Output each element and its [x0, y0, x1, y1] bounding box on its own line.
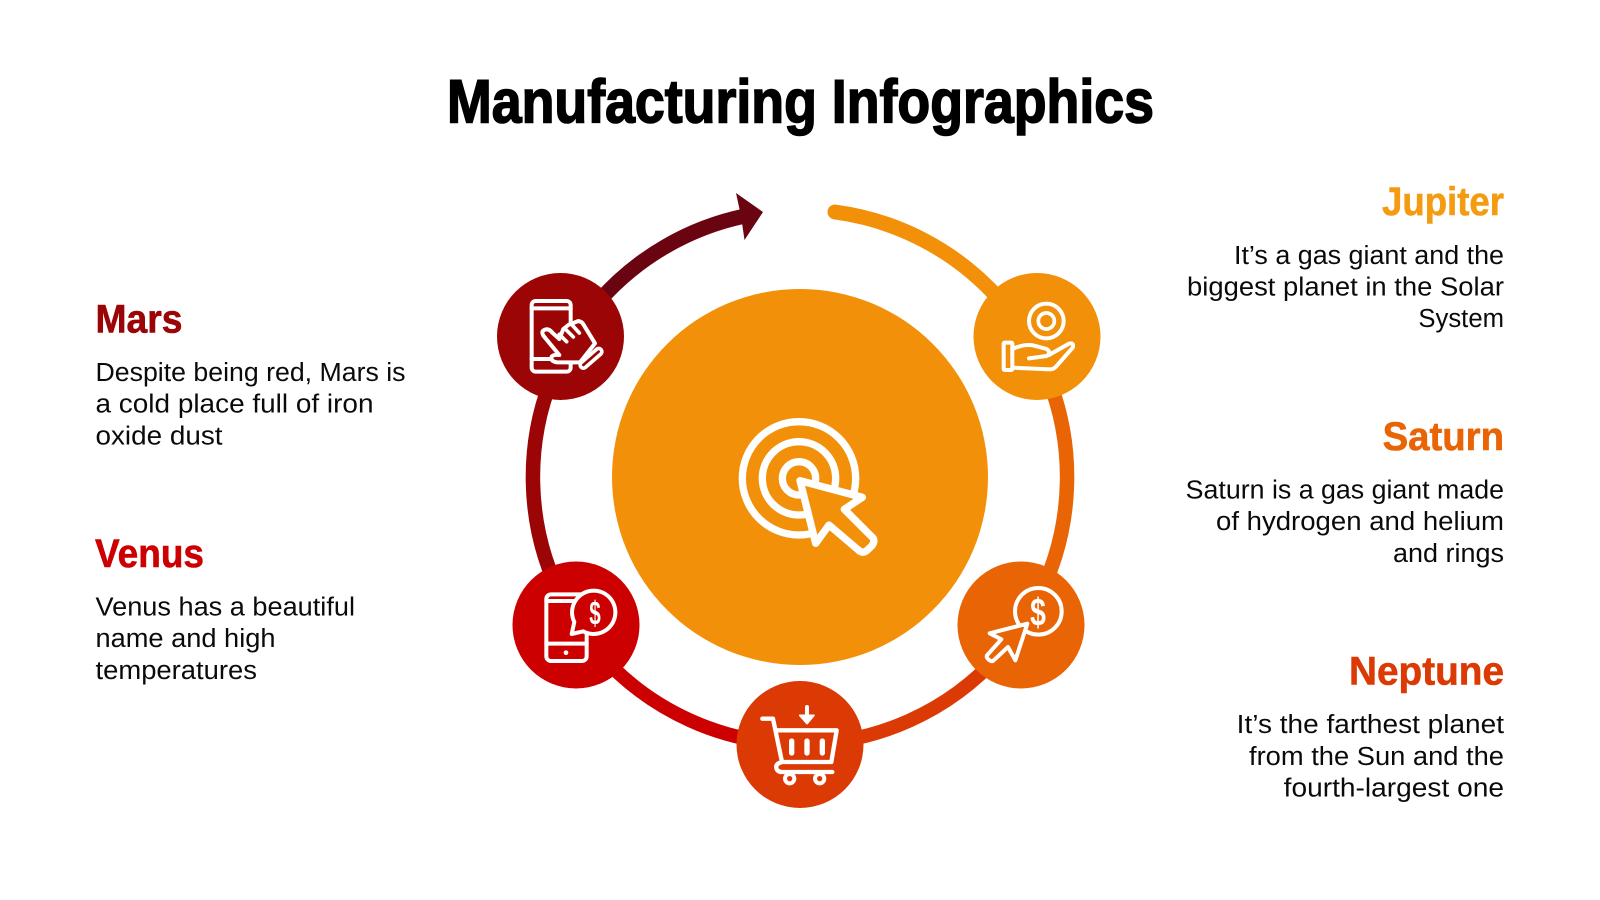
body: Saturn: Saturn is a gas giant made — [1186, 477, 1504, 505]
icon: hand holding coin — [1004, 304, 1073, 370]
node: Saturn — [958, 562, 1084, 688]
icon: target with cursor — [742, 422, 874, 552]
icon: hand tapping phone — [532, 301, 599, 372]
body: Mars — [96, 359, 406, 450]
text block: Mars — [96, 298, 406, 450]
icon: shopping cart — [762, 707, 837, 783]
body: Venus: temperatures — [96, 657, 257, 685]
body: Jupiter: biggest planet in the Solar — [1187, 274, 1505, 302]
ring arc: lower right — [800, 654, 1000, 744]
ring arc: orange top — [835, 212, 1000, 300]
ring arc: lower left — [600, 654, 800, 744]
heading: Saturn: Saturn — [1383, 415, 1504, 459]
heading: Mars: Mars — [96, 298, 182, 342]
body: Mars: oxide dust — [96, 422, 222, 450]
node: Venus — [512, 562, 640, 688]
body: Saturn: and rings — [1393, 540, 1504, 568]
icon: cursor clicking dollar coin: $ — [1030, 591, 1046, 635]
body: Saturn: of hydrogen and helium — [1216, 508, 1504, 536]
body: Neptune: It’s the farthest planet — [1237, 711, 1504, 739]
text block: Jupiter — [1187, 180, 1505, 333]
node: Neptune — [736, 681, 864, 808]
body: Saturn — [1186, 477, 1504, 568]
body: Venus — [96, 594, 355, 685]
body: Neptune — [1237, 711, 1504, 803]
heading: Jupiter: Jupiter — [1382, 180, 1504, 224]
ring arc: left — [533, 360, 565, 604]
body: Mars: a cold place full of iron — [96, 391, 374, 419]
title: Manufacturing Infographics — [447, 68, 1154, 136]
icon: phone with dollar bubble: $ — [589, 595, 601, 632]
central circle — [612, 289, 988, 665]
text block: Venus — [95, 532, 355, 685]
node: Mars — [497, 273, 624, 400]
text block: Saturn — [1186, 415, 1504, 568]
body: Venus: name and high — [96, 625, 276, 653]
heading: Neptune: Neptune — [1349, 650, 1504, 694]
body: Jupiter: System — [1418, 305, 1504, 333]
body: Jupiter: It’s a gas giant and the — [1234, 242, 1504, 270]
panel: circular cycle diagram — [497, 193, 1100, 808]
heading: Venus: Venus — [95, 532, 204, 576]
ring arc: right — [1035, 360, 1067, 604]
arrow: cycle direction — [600, 193, 763, 300]
body: Jupiter — [1187, 242, 1505, 333]
text block: Neptune — [1237, 650, 1504, 803]
body: Venus: Venus has a beautiful — [96, 594, 355, 622]
node: Jupiter — [974, 273, 1100, 400]
body: Neptune: from the Sun and the — [1249, 743, 1504, 771]
body: Mars: Despite being red, Mars is — [96, 359, 406, 387]
body: Neptune: fourth-largest one — [1284, 775, 1504, 803]
